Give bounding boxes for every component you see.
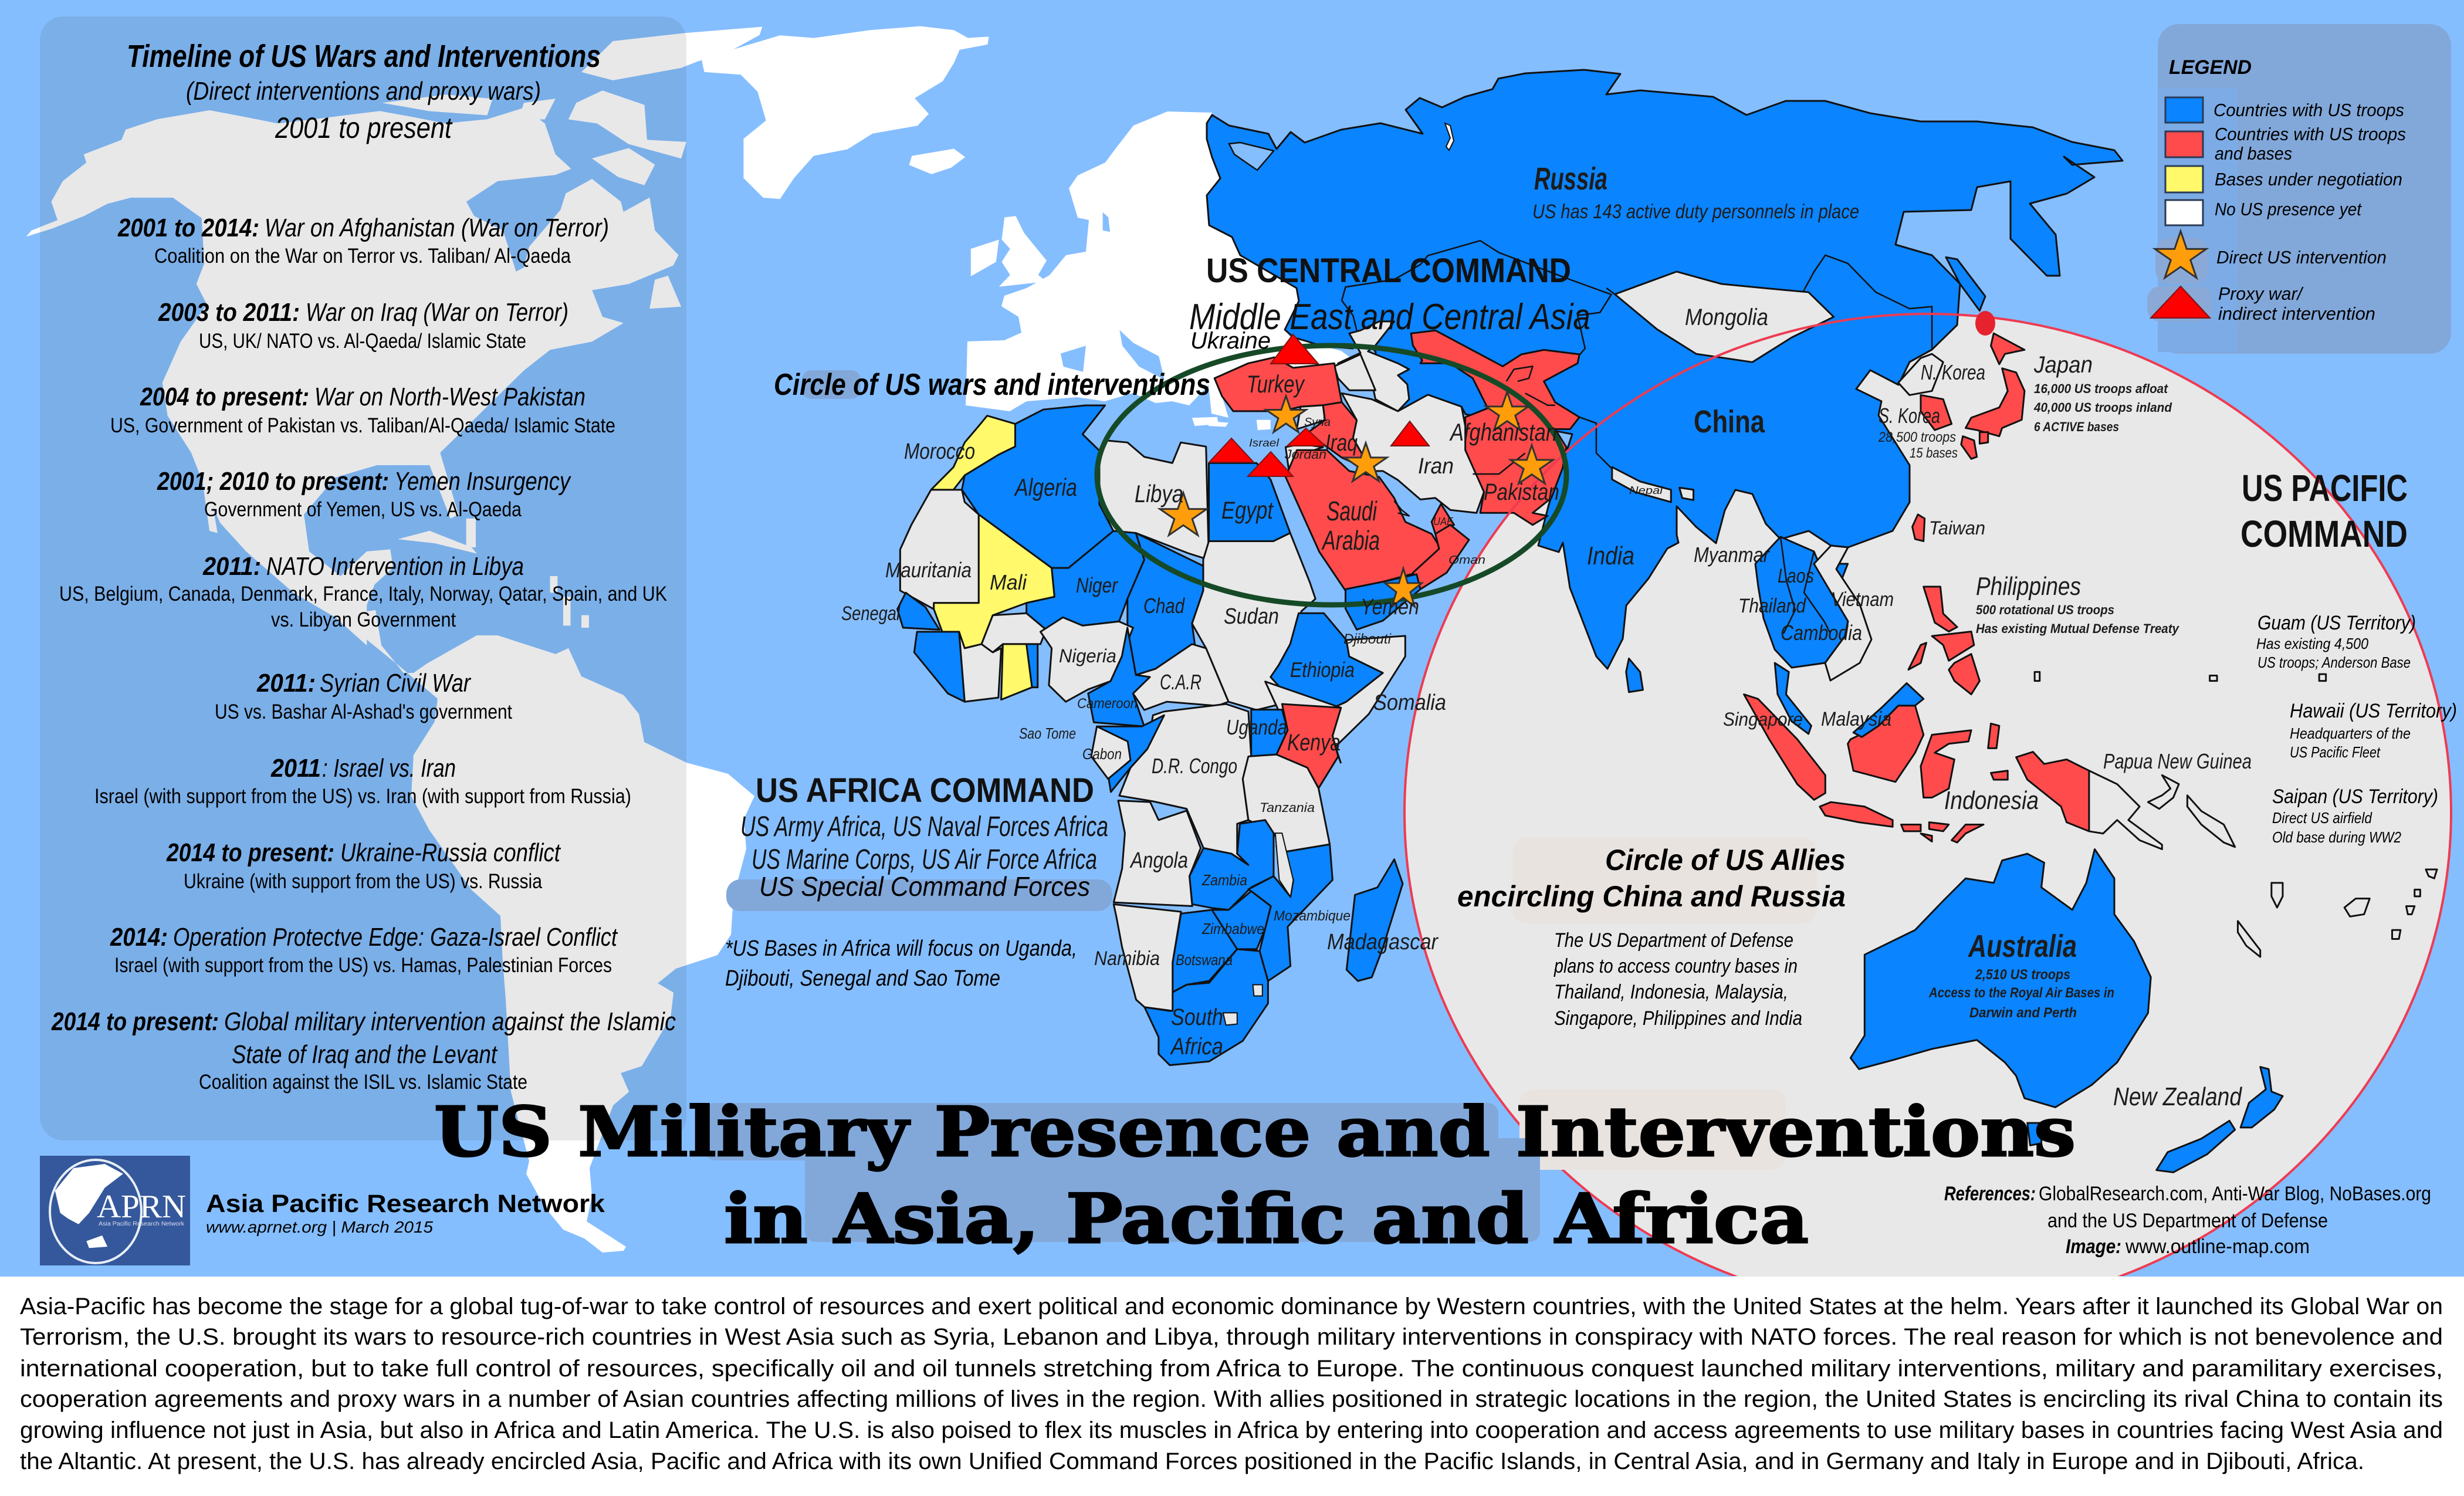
proxy war triangles xyxy=(1209,334,1429,476)
main title: in Asia, Pacific and Africa xyxy=(724,1179,1809,1259)
timeline entry: Israel vs Iran: 2011 xyxy=(270,754,321,783)
timeline entry: Israel vs Iran xyxy=(94,754,631,808)
country labels: Africa and Middle East: Africa xyxy=(1170,1034,1223,1060)
timeline entry: ISIL: Global military intervention against the Islamic xyxy=(224,1007,676,1036)
references: Image: xyxy=(2066,1236,2121,1258)
US territories notes: Direct US airfield xyxy=(2272,809,2372,827)
US territories notes: Old base during WW2 xyxy=(2272,828,2401,846)
country labels: Asia and Pacific: Papua New Guinea xyxy=(2103,749,2252,773)
direct intervention stars xyxy=(1160,392,1553,607)
country labels: Africa and Middle East: Saudi xyxy=(1326,496,1377,526)
country labels: Asia and Pacific: India xyxy=(1587,541,1634,570)
panel heading: (Direct interventions and proxy wars) xyxy=(186,77,541,106)
US territories notes: US troops; Anderson Base xyxy=(2257,654,2411,671)
legend item: troops and bases: Countries with US troops xyxy=(2215,124,2406,144)
country labels: Africa and Middle East: Madagascar xyxy=(1327,930,1439,955)
references: www.outline-map.com xyxy=(2125,1236,2310,1258)
legend item: troops: Countries with US troops xyxy=(2213,100,2404,120)
country labels: Asia and Pacific: Philippines xyxy=(1976,572,2081,601)
legend item: triangle xyxy=(2147,283,2375,324)
timeline entry: Libya: vs. Libyan Government xyxy=(271,608,456,631)
US territories notes: Saipan (US Territory) xyxy=(2272,786,2438,808)
allies note: Singapore, Philippines and India xyxy=(1554,1007,1802,1030)
country labels: Africa and Middle East: Mauritania xyxy=(885,558,972,582)
country labels: Africa and Middle East: Arabia xyxy=(1321,525,1380,556)
timeline entry: Ukraine: Ukraine-Russia conflict xyxy=(340,838,561,867)
timeline entry: Yemen xyxy=(157,467,571,521)
country labels: Asia and Pacific: Indonesia xyxy=(1944,786,2039,815)
country labels: Africa and Middle East: Angola xyxy=(1129,848,1188,873)
timeline entry: Ukraine xyxy=(166,838,561,893)
country labels: Asia and Pacific: 28,500 troops xyxy=(1878,429,1956,445)
country labels: Asia and Pacific: Mongolia xyxy=(1685,304,1768,330)
country labels: Asia and Pacific: Darwin and Perth xyxy=(1969,1005,2077,1021)
country labels: Asia and Pacific: 2,510 US troops xyxy=(1975,967,2070,983)
command headings: US PACIFIC xyxy=(2242,467,2408,509)
country labels: Africa and Middle East: Chad xyxy=(1143,594,1185,618)
legend item: triangle: indirect intervention xyxy=(2218,303,2375,324)
timeline entry: Afghanistan xyxy=(117,214,609,268)
country labels: Africa and Middle East: Algeria xyxy=(1014,473,1077,501)
country labels: Asia and Pacific: China xyxy=(1694,404,1765,439)
legend item: negotiation: Bases under negotiation xyxy=(2215,169,2402,189)
country labels: Africa and Middle East: Tanzania xyxy=(1260,800,1315,815)
country labels: Asia and Pacific: Has existing Mutual Defense Treaty xyxy=(1976,621,2180,636)
country labels: Asia and Pacific: 6 ACTIVE bases xyxy=(2034,419,2119,434)
country labels: Africa and Middle East: Sao Tome xyxy=(1019,725,1076,742)
country labels: Africa and Middle East: Syria xyxy=(1304,416,1331,429)
country labels: Asia and Pacific: Japan xyxy=(2033,352,2093,378)
timeline entry: Yemen: 2001; 2010 to present: xyxy=(157,467,389,496)
Middle East circle: circle of US wars xyxy=(1097,346,1566,605)
body paragraph: the Altantic. At present, the U.S. has already encircled Asia, Pacific and Africa with its own Unified Command Forces positioned in the Pacific Islands, in Central Asia, and in Germany and Italy in Europe and in Djibouti, Africa. xyxy=(20,1448,2364,1474)
country labels: Asia and Pacific: Cambodia xyxy=(1781,621,1862,645)
command headings: US Special Command Forces xyxy=(759,871,1090,902)
command headings xyxy=(725,252,2408,991)
country labels: Asia and Pacific: Laos xyxy=(1778,565,1814,587)
legend item: troops and bases: and bases xyxy=(2215,143,2292,164)
legend item: star: Direct US intervention xyxy=(2216,247,2387,268)
logo: APRN: APRN xyxy=(97,1189,186,1225)
timeline entry: ISIL: Coalition against the ISIL vs. Islamic State xyxy=(199,1071,527,1094)
legend item: star xyxy=(2155,231,2387,284)
country labels: Africa and Middle East: Niger xyxy=(1076,573,1119,597)
organisation name and date xyxy=(206,1190,605,1236)
legend item: troops xyxy=(2165,97,2404,123)
country labels: Africa and Middle East: Mali xyxy=(990,570,1027,594)
timeline entry: Libya xyxy=(59,552,667,631)
country labels: Asia and Pacific xyxy=(1532,161,2252,1111)
main title: US Military Presence and Interventions xyxy=(434,1092,2076,1172)
country labels: Africa and Middle East: Uganda xyxy=(1226,715,1287,739)
timeline entry: Afghanistan: 2001 to 2014: xyxy=(117,214,259,242)
legend item: troops and bases xyxy=(2165,124,2406,164)
country labels: Africa and Middle East: Djibouti xyxy=(1343,631,1392,647)
country labels: Asia and Pacific: 40,000 US troops inland xyxy=(2033,400,2172,415)
timeline entry: Gaza xyxy=(110,923,618,977)
country labels: Africa and Middle East: Iraq xyxy=(1325,430,1358,456)
timeline entry: Iraq: 2003 to 2011: xyxy=(158,298,300,327)
highlight blocks behind headings xyxy=(705,370,1817,1242)
country labels: Africa and Middle East: C.A.R xyxy=(1160,670,1201,694)
timeline entry: Yemen: Yemen Insurgency xyxy=(394,467,571,496)
country labels: Africa and Middle East: UAE xyxy=(1433,516,1454,527)
country labels: Asia and Pacific: Russia xyxy=(1534,161,1607,197)
timeline entry: Syria: 2011: xyxy=(256,669,316,698)
timeline entry: Ukraine: Ukraine (with support from the US) vs. Russia xyxy=(184,870,542,893)
country labels: Asia and Pacific: US has 143 active duty personnels in place xyxy=(1532,201,1859,223)
panel heading xyxy=(127,39,601,144)
country labels: Africa and Middle East: Cameroon xyxy=(1077,696,1138,712)
country labels: Asia and Pacific: Thailand xyxy=(1738,595,1806,617)
timeline entry: Syria: Syrian Civil War xyxy=(320,669,472,698)
panel: timeline background xyxy=(40,16,686,1140)
logo: APRN xyxy=(40,1156,190,1265)
timeline entry: ISIL: 2014 to present: xyxy=(51,1007,219,1036)
marker on Pacific circle xyxy=(1975,311,1995,336)
country labels: Africa and Middle East: Yemen xyxy=(1360,595,1419,620)
allies note xyxy=(1553,929,1802,1030)
legend panel xyxy=(2147,24,2451,354)
country labels: Africa and Middle East: Israel xyxy=(1249,437,1280,449)
panel heading: Timeline of US Wars and Interventions xyxy=(127,39,601,74)
command headings: COMMAND xyxy=(2240,513,2408,555)
country labels: Asia and Pacific: Malaysia xyxy=(1821,708,1891,730)
panel: timeline of US wars text xyxy=(51,39,676,1094)
US territories notes: Guam (US Territory) xyxy=(2257,612,2416,634)
country labels: Africa and Middle East: Afghanistan xyxy=(1449,418,1557,446)
country labels: Asia and Pacific: Myanmar xyxy=(1694,543,1771,567)
country labels: Asia and Pacific: 16,000 US troops afloat xyxy=(2034,381,2169,396)
timeline entry: Syria xyxy=(215,669,512,723)
country labels: Africa and Middle East: Ethiopia xyxy=(1290,658,1355,682)
Pacific circle fill xyxy=(1404,314,2451,1311)
timeline entry: Pakistan: US, Government of Pakistan vs. Taliban/Al-Qaeda/ Islamic State xyxy=(110,414,615,437)
timeline entry: Gaza: Israel (with support from the US) vs. Hamas, Palestinian Forces xyxy=(114,954,612,977)
country labels: Asia and Pacific: 15 bases xyxy=(1910,445,1958,461)
timeline entry: Afghanistan: War on Afghanistan (War on Terror) xyxy=(265,214,609,242)
command headings: Djibouti, Senegal and Sao Tome xyxy=(725,966,1000,991)
country labels: Africa and Middle East: Botswana xyxy=(1176,951,1233,969)
country labels: Africa and Middle East: Senegal xyxy=(841,603,901,625)
map: Africa north xyxy=(898,405,1405,763)
panel heading: 2001 to present xyxy=(275,111,453,144)
country labels: Asia and Pacific: Nepal xyxy=(1629,485,1663,496)
body paragraph: growing influence not just in Asia, but also in Africa and Latin America. The U.S. is also poised to flex its muscles in Africa by entering into cooperation and access agreements to use military bases in countries facing West Asia and xyxy=(20,1417,2443,1443)
country labels: Africa and Middle East: Jordan xyxy=(1284,447,1326,462)
command headings: *US Bases in Africa will focus on Uganda, xyxy=(725,936,1077,961)
timeline entry: Libya: 2011: xyxy=(202,552,261,581)
timeline entry: Iraq xyxy=(158,298,568,353)
country labels: Africa and Middle East: Iran xyxy=(1418,454,1454,479)
country labels: Africa and Middle East xyxy=(841,370,1559,1060)
allies note: plans to access country bases in xyxy=(1553,955,1798,977)
country labels: Africa and Middle East: Morocco xyxy=(904,439,975,464)
body paragraph xyxy=(20,1294,2443,1474)
map: Southeast Asia xyxy=(1626,537,2437,957)
US territories notes: US Pacific Fleet xyxy=(2290,743,2381,761)
command headings: Middle East and Central Asia xyxy=(1189,297,1590,337)
country labels: Africa and Middle East: Zimbabwe xyxy=(1201,920,1264,937)
country labels: Africa and Middle East: Gabon xyxy=(1082,745,1122,763)
command headings: US AFRICA COMMAND xyxy=(756,771,1094,810)
country labels: Africa and Middle East: Turkey xyxy=(1247,370,1305,398)
command headings: US CENTRAL COMMAND xyxy=(1206,252,1571,290)
timeline entry: Iraq: US, UK/ NATO vs. Al-Qaeda/ Islamic State xyxy=(199,330,526,353)
timeline entry: Iraq: War on Iraq (War on Terror) xyxy=(306,298,568,327)
references: References: xyxy=(1944,1183,2036,1205)
country labels: Asia and Pacific: Taiwan xyxy=(1929,517,1985,539)
timeline entry: Gaza: Operation Protectve Edge: Gaza-Israel Conflict xyxy=(173,923,618,952)
timeline entry: Afghanistan: Coalition on the War on Terror vs. Taliban/ Al-Qaeda xyxy=(154,245,571,268)
body paragraph: international cooperation, but to take full control of resources, specifically oil and oil tunnels stretching from Africa to Europe. The continuous conquest launched military interventions, military and paramilitary exercises, xyxy=(20,1356,2443,1382)
bottom white band xyxy=(0,1277,2464,1496)
organisation name and date: www.aprnet.org | March 2015 xyxy=(206,1218,433,1236)
country labels: Africa and Middle East: Somalia xyxy=(1373,691,1446,715)
timeline entry: Pakistan: 2004 to present: xyxy=(140,383,309,411)
US territories notes xyxy=(2256,612,2457,846)
country labels: Africa and Middle East: Namibia xyxy=(1094,947,1160,970)
timeline entry: ISIL xyxy=(51,1007,676,1094)
timeline entry: Ukraine: 2014 to present: xyxy=(166,838,334,867)
allies note: The US Department of Defense xyxy=(1554,929,1793,952)
legend item: no presence xyxy=(2165,199,2362,225)
Pacific circle: circle of US allies outline xyxy=(1404,314,2451,1311)
references: and the US Department of Defense xyxy=(2047,1210,2328,1232)
country labels: Africa and Middle East: Libya xyxy=(1135,480,1183,507)
country labels: Asia and Pacific: N. Korea xyxy=(1921,360,1985,384)
map: Japan and Taiwan xyxy=(1913,333,2025,541)
country labels: Africa and Middle East: Kenya xyxy=(1287,730,1341,756)
timeline entry: Israel vs Iran: : Israel vs. Iran xyxy=(322,754,456,783)
command headings: US Army Africa, US Naval Forces Africa xyxy=(740,811,1108,842)
command headings: Circle of US Allies xyxy=(1605,844,1846,876)
map: Americas xyxy=(26,27,762,1253)
timeline entry: Libya: US, Belgium, Canada, Denmark, France, Italy, Norway, Qatar, Spain, and UK xyxy=(59,583,667,605)
timeline entry: Gaza: 2014: xyxy=(110,923,168,952)
timeline entry: Israel vs Iran: Israel (with support from the US) vs. Iran (with support from Russia) xyxy=(94,785,631,808)
timeline entry: Syria: US vs. Bashar Al-Ashad's government xyxy=(215,700,512,723)
legend item: triangle: Proxy war/ xyxy=(2218,283,2304,304)
timeline entry: Yemen: Government of Yemen, US vs. Al-Qaeda xyxy=(204,498,522,521)
country labels: Asia and Pacific: Singapore xyxy=(1723,709,1803,730)
timeline entry: Pakistan: War on North-West Pakistan xyxy=(314,383,585,411)
country labels: Africa and Middle East: Oman xyxy=(1448,554,1485,567)
timeline entry: ISIL: State of Iraq and the Levant xyxy=(232,1040,497,1069)
country labels: Asia and Pacific: 500 rotational US troops xyxy=(1976,603,2114,617)
country labels: Africa and Middle East: Egypt xyxy=(1221,496,1274,524)
map: Africa south xyxy=(1091,682,1403,1065)
country labels: Africa and Middle East: Zambia xyxy=(1201,871,1247,889)
legend item: negotiation xyxy=(2165,166,2402,192)
timeline entry: Libya: NATO Intervention in Libya xyxy=(266,552,524,581)
country labels: Asia and Pacific: S. Korea xyxy=(1879,404,1940,428)
country labels: Africa and Middle East: Mozambique xyxy=(1274,908,1351,924)
organisation name and date: Asia Pacific Research Network xyxy=(206,1190,605,1218)
map: Middle East xyxy=(1214,321,1579,629)
country labels: Asia and Pacific: Vietnam xyxy=(1831,588,1894,611)
country labels: Africa and Middle East: Sudan xyxy=(1224,604,1279,629)
country labels: Asia and Pacific: Access to the Royal Air Bases in xyxy=(1928,985,2114,1001)
command headings: Circle of US wars and interventions xyxy=(774,368,1210,402)
country labels: Africa and Middle East: Nigeria xyxy=(1059,645,1116,666)
command headings: encircling China and Russia xyxy=(1457,880,1846,913)
legend heading: LEGEND xyxy=(2169,56,2252,79)
timeline entry: Pakistan xyxy=(110,383,615,437)
body paragraph: cooperation agreements and proxy wars in a number of Asian countries affecting millions of lives in the region. With allies positioned in strategic locations in the region, the United States is encircling its rival China to contain its xyxy=(20,1386,2443,1412)
references xyxy=(1944,1183,2431,1258)
US territories notes: Has existing 4,500 xyxy=(2256,635,2368,652)
map: Australia and New Zealand xyxy=(1850,849,2283,1172)
country labels: Africa and Middle East: Pakistan xyxy=(1484,479,1559,505)
country labels: Asia and Pacific: New Zealand xyxy=(2113,1082,2242,1111)
country labels: Africa and Middle East: South xyxy=(1171,1004,1223,1030)
map: Eurasia countries with US troops xyxy=(1207,70,2123,669)
main title xyxy=(434,1092,2076,1259)
command headings: Ukraine xyxy=(1190,328,1271,354)
body paragraph: Terrorism, the U.S. brought its wars to resource-rich countries in West Asia such as Syria, Lebanon and Libya, through military interventions in conspiracy with NATO forces. The real reason for which is not benevolence and xyxy=(20,1324,2443,1350)
map: Greenland, Iceland, Britain, Europe xyxy=(702,26,1352,430)
legend item: no presence: No US presence yet xyxy=(2215,199,2362,219)
body paragraph: Asia-Pacific has become the stage for a global tug-of-war to take control of resources and exert political and economic dominance by Western countries, with the United States at the helm. Years after it launched its Global War on xyxy=(20,1294,2443,1319)
US territories notes: Headquarters of the xyxy=(2290,725,2411,742)
country labels: Africa and Middle East: D.R. Congo xyxy=(1152,754,1237,778)
country labels: Asia and Pacific: Australia xyxy=(1967,929,2077,964)
allies note: Thailand, Indonesia, Malaysia, xyxy=(1554,981,1788,1003)
logo: APRN: Asia Pacific Research Network xyxy=(99,1221,185,1227)
command headings: US Marine Corps, US Air Force Africa xyxy=(752,844,1097,875)
